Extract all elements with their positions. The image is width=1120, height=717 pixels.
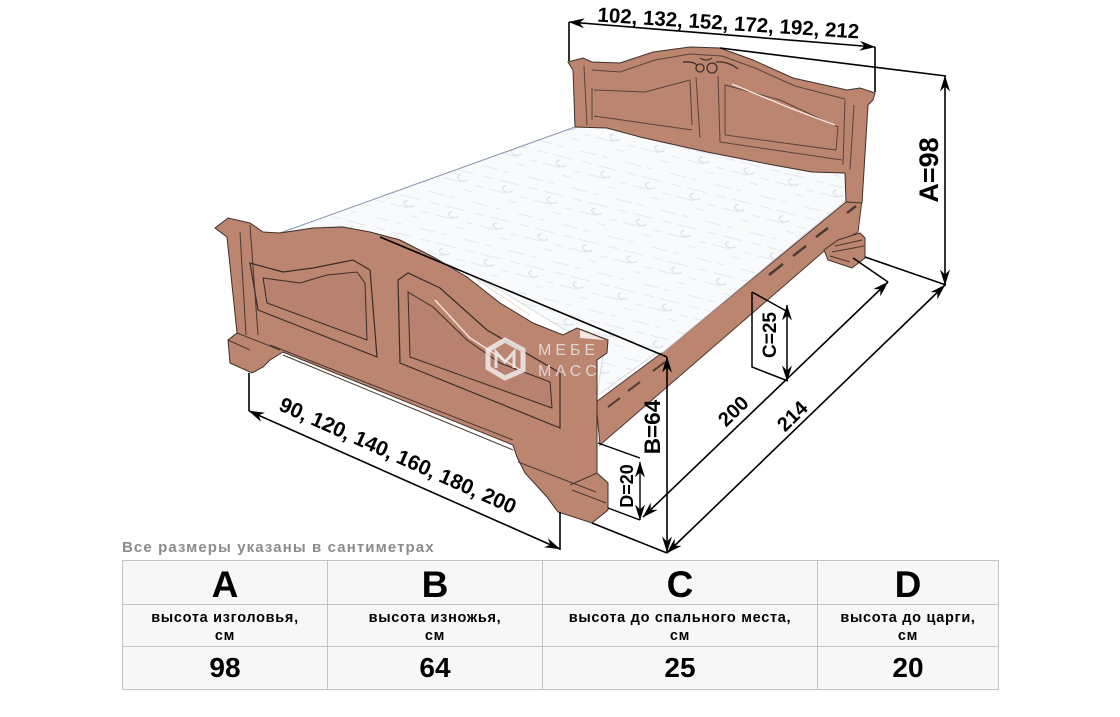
- dimension: length 214: 214: [773, 397, 813, 436]
- cell: A: A: [212, 564, 238, 605]
- cell: B: B: [422, 564, 448, 605]
- dimension: length 200: [643, 258, 888, 517]
- dimension: A=98: [720, 48, 946, 285]
- dimension: B=64: B=64: [640, 399, 665, 454]
- label: B: [328, 605, 543, 647]
- value: D: 20: [892, 652, 924, 683]
- cell: D: [818, 561, 998, 605]
- watermark: [486, 337, 596, 381]
- label: C: [543, 605, 818, 647]
- table of dimensions: [122, 560, 999, 690]
- cell: C: [543, 561, 818, 605]
- mattress left edge: [280, 127, 575, 233]
- label: D: [818, 605, 998, 647]
- value: A: [123, 647, 328, 689]
- label: B: см: [425, 628, 445, 644]
- icon: headboard carving: [683, 58, 738, 73]
- cell: A: [123, 561, 328, 605]
- label: C: высота до спального места,: [569, 610, 791, 626]
- dimension: length 214: [592, 285, 945, 553]
- headboard: [568, 47, 875, 203]
- dimension: headboard width: [569, 4, 875, 92]
- value: B: 64: [419, 652, 451, 683]
- label: A: [123, 605, 328, 647]
- side rail: [596, 200, 862, 445]
- dimension: C=25: [752, 292, 788, 381]
- value: A: 98: [209, 652, 241, 683]
- label: C: см: [670, 628, 690, 644]
- label: A: высота изголовья,: [151, 610, 299, 626]
- value: C: [543, 647, 818, 689]
- dimension: footboard width: [249, 373, 560, 550]
- note: units: Все размеры указаны в сантиметрах: [122, 539, 435, 556]
- cell: D: D: [895, 564, 921, 605]
- value: C: 25: [664, 652, 696, 683]
- rear foot: [824, 233, 865, 268]
- right panel: [398, 273, 560, 428]
- dimension: headboard width: 102, 132, 152, 172, 192, 212: [597, 4, 860, 43]
- dimension: footboard width: 90, 120, 140, 160, 180, 200: [276, 393, 520, 519]
- footboard: [215, 218, 608, 523]
- value: B: [328, 647, 543, 689]
- watermark: МАССИВ: [538, 363, 631, 380]
- cell: B: [328, 561, 543, 605]
- cell: C: C: [667, 564, 693, 605]
- dimension: A=98: A=98: [914, 137, 944, 203]
- dimension: B=64: [380, 237, 667, 552]
- dimension: C=25: C=25: [760, 312, 781, 358]
- watermark: МЕБЕЛЬ: [538, 342, 628, 359]
- label: D: см: [898, 628, 918, 644]
- label: B: высота изножья,: [369, 610, 501, 626]
- dimension: D=20: D=20: [617, 464, 637, 508]
- bed drawing with dimensions: [214, 8, 950, 554]
- mattress: [280, 127, 846, 396]
- dimension: length 200: 200: [714, 392, 753, 431]
- base moulding: [228, 225, 606, 503]
- left panel: [250, 260, 377, 357]
- label: D: высота до царги,: [840, 610, 976, 626]
- dimension: D=20: [598, 443, 640, 520]
- label: A: см: [215, 628, 235, 644]
